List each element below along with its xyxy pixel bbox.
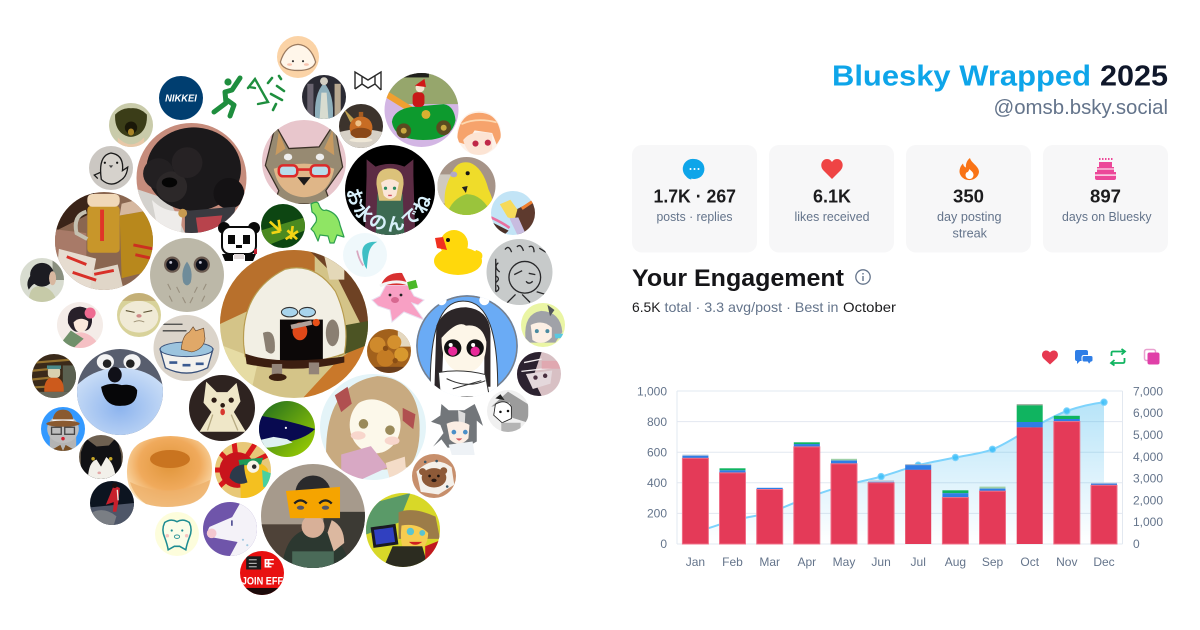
month labels: Jul [911,555,926,569]
avatar: girl in kimono with flower [57,302,103,348]
right axis labels: 3,000 [1133,472,1163,486]
stat: 350: 350 [953,186,984,206]
month labels: Dec [1093,555,1115,569]
avatar: ceramic owl [150,238,224,312]
avatar: grey haired anime girl [521,303,565,347]
text: handle: @omsb.bsky.social [994,97,1168,119]
left axis labels [637,384,667,551]
avatar: brown haired girl with book [320,374,426,480]
avatar: rainbow hand [491,191,535,235]
panel: posts and replies stat card [632,145,757,252]
avatar: comic character with hat [366,493,440,567]
left axis labels: 0 [660,537,667,551]
avatar: white fluffy dog [189,375,255,441]
cumulative line [695,402,1104,531]
avatar: fried chicken [367,329,411,373]
avatar: black poodle [136,123,246,233]
heading: Bluesky Wrapped 2025: 2025 [1100,60,1168,92]
icon: outlined M logo [355,72,381,90]
stacked bars [682,404,1117,544]
icon: glazed donut [127,436,212,507]
avatar: parrot on rising sun [215,442,271,498]
avatar: Nikkei logo: NIKKEI [165,94,197,105]
icon: green running figure [214,78,240,116]
avatar: tooth mascot [155,512,199,556]
text: engagement summary: October [843,299,896,315]
month labels: Feb [722,555,743,569]
avatar: monochrome manga girl [487,390,529,432]
avatar: bear cookie [412,454,456,498]
icon: flame [960,158,979,180]
chart: monthly engagement stacked bars with cumulative line [637,384,1163,569]
icon: rubber duck [434,230,482,275]
icon: pixel panda [218,222,260,261]
label: likes received: likes received [794,210,870,224]
right axis labels: 7,000 [1133,384,1163,398]
avatar: witch girl with hood: お水のんでね [347,188,431,232]
month labels: Mar [759,555,780,569]
month labels: Aug [945,555,966,569]
icon: pink axolotl with santa hat [372,273,424,322]
avatar: dumpling [277,36,319,78]
label: posts · replies: posts · replies [656,210,732,224]
month labels: Sep [982,555,1003,569]
avatar: girl in polar bear hood [416,295,518,397]
avatar: dark monochrome face [517,352,561,396]
month labels: Oct [1020,555,1040,569]
avatar: blue furry monster [77,349,163,435]
month labels [686,555,1115,569]
avatar: EFF join banner: EF [264,557,275,571]
right axis labels: 4,000 [1133,450,1163,464]
grid lines [677,391,1122,544]
icon: green elephant [311,202,344,243]
stat: 6.1K: 6.1K [813,186,851,206]
label: day posting streak: day posting [937,210,1002,224]
left axis labels: 1,000 [637,384,667,398]
avatar: honey pot [339,104,383,148]
cumulative area [695,402,1104,544]
avatar: EFF join banner [240,551,284,595]
month labels: Nov [1056,555,1077,569]
label: days on Bluesky: days on Bluesky [1062,210,1152,224]
avatar: orange haired anime face [457,111,501,156]
icon: heart [821,159,843,179]
icon: chat bubble [683,159,704,180]
avatar: cat in tea cup [154,315,220,381]
avatar: man with hat and glasses [41,407,85,451]
left axis labels: 400 [647,476,667,490]
avatar: figure in wicker [32,354,76,398]
avatar: yellow flower [261,204,305,248]
left axis labels: 200 [647,506,667,520]
avatar: wolf with red glasses [262,120,346,204]
avatar: sleeping white cat [117,293,161,337]
avatar: santa in green car [384,73,458,147]
panel: day posting streak stat card [906,145,1031,252]
month labels: May [833,555,855,569]
text: engagement summary [632,299,896,315]
avatar: Nikkei logo [159,76,203,120]
avatar: hand drawn chick [89,146,133,190]
heading: Your Engagement: Your Engagement [632,265,844,292]
avatar: white horse on purple [203,502,257,556]
icon: reposts arrows legend [1111,349,1125,366]
avatar: green whale [259,401,315,457]
icon: replies bubbles legend [1075,350,1093,364]
avatar: beer mugs [55,192,153,290]
right axis labels: 1,000 [1133,515,1163,529]
avatar: onigiri character [220,250,368,398]
avatar: girl seen from behind [20,258,64,302]
month labels: Jan [686,555,705,569]
avatar: grey wolf eared girl [431,404,483,455]
avatar: pale teal crescent [343,233,387,277]
left axis labels: 800 [647,415,667,429]
icon: quotes squares legend [1144,350,1160,364]
avatar: EFF join banner: JOIN EFF [242,575,283,587]
legend: engagement types [1042,349,1160,366]
month labels: Apr [797,555,816,569]
right axis labels: 6,000 [1133,406,1163,420]
avatar: witch girl with hood [345,145,435,235]
label: day posting streak [937,210,1002,240]
avatar: yellow parakeet [438,157,496,215]
month labels: Jun [871,555,891,569]
cumulative points [878,399,1107,480]
right axis labels: 0 [1133,537,1140,551]
avatar: figure in red outfit [90,481,134,525]
heading: Bluesky Wrapped 2025: Bluesky Wrapped [832,60,1091,92]
icon: green flipped table [248,76,284,110]
right axis labels: 2,000 [1133,494,1163,508]
text: engagement summary: 6.5K [632,299,661,315]
avatar: person holding orange mask [261,464,365,568]
left axis labels: 600 [647,446,667,460]
panel: avatar bubble cluster [20,36,565,595]
stat: 1.7K · 267: 1.7K · 267 [654,186,736,206]
right axis labels [1133,384,1163,551]
avatar: pencil scribble face [486,239,552,305]
stat: 897: 897 [1090,186,1121,206]
label: day posting streak: streak [952,226,988,240]
right axis labels: 5,000 [1133,428,1163,442]
icon: birthday cake [1095,158,1116,180]
avatar: bronze bear [109,103,153,147]
panel: days on Bluesky stat card [1043,145,1168,252]
panel: likes received stat card [769,145,894,252]
avatar: tarot card [302,75,346,119]
icon: likes heart legend [1042,350,1058,364]
icon: info circle [856,270,870,284]
avatar: black and white cat [79,435,123,479]
text: engagement summary: total · 3.3 avg/post · Best in [664,299,838,315]
